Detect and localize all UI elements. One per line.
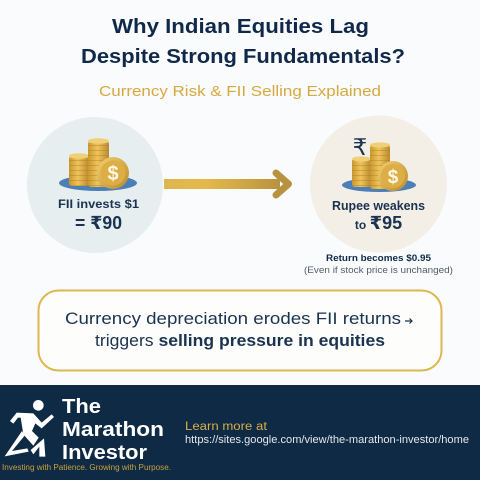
icon: gold coins: $ (107, 163, 119, 185)
brand name: The (62, 396, 101, 418)
callout (38, 290, 442, 370)
footer (0, 385, 480, 480)
title: Despite Strong Fundamentals? (81, 46, 405, 68)
url: https://sites.google.com/view/the-marathon-investor/home (185, 434, 469, 446)
icon: rupee symbol: ₹ (353, 134, 367, 160)
value: 90 rupees: = ₹90 (75, 213, 122, 233)
callout: triggers selling pressure in equities (95, 331, 385, 350)
callout: Currency depreciation erodes FII returns (65, 309, 401, 328)
brand name (62, 396, 164, 464)
title: Why Indian Equities Lag (112, 16, 369, 38)
text: return becomes: Return becomes $0.95 (326, 253, 431, 263)
subtitle: Currency Risk & FII Selling Explained (99, 83, 381, 100)
icon: gold coins: $ (388, 167, 399, 188)
panel: rupee weakens (310, 116, 447, 252)
tagline: Investing with Patience. Growing with Purpose. (2, 463, 171, 472)
brand name: Marathon (62, 419, 164, 441)
arrow (164, 173, 288, 195)
brand name: Investor (62, 442, 147, 464)
icon: runner (5, 400, 54, 457)
label: rupee weakens: Rupee weakens (332, 199, 425, 213)
value: to 95 rupees: to ₹95 (355, 213, 402, 233)
learn more: Learn more at (185, 421, 268, 433)
label: FII invests $1: FII invests $1 (58, 197, 139, 211)
text: stock price note: (Even if stock price is unchanged) (304, 265, 453, 275)
title (81, 16, 405, 68)
panel: FII invests (27, 117, 163, 253)
